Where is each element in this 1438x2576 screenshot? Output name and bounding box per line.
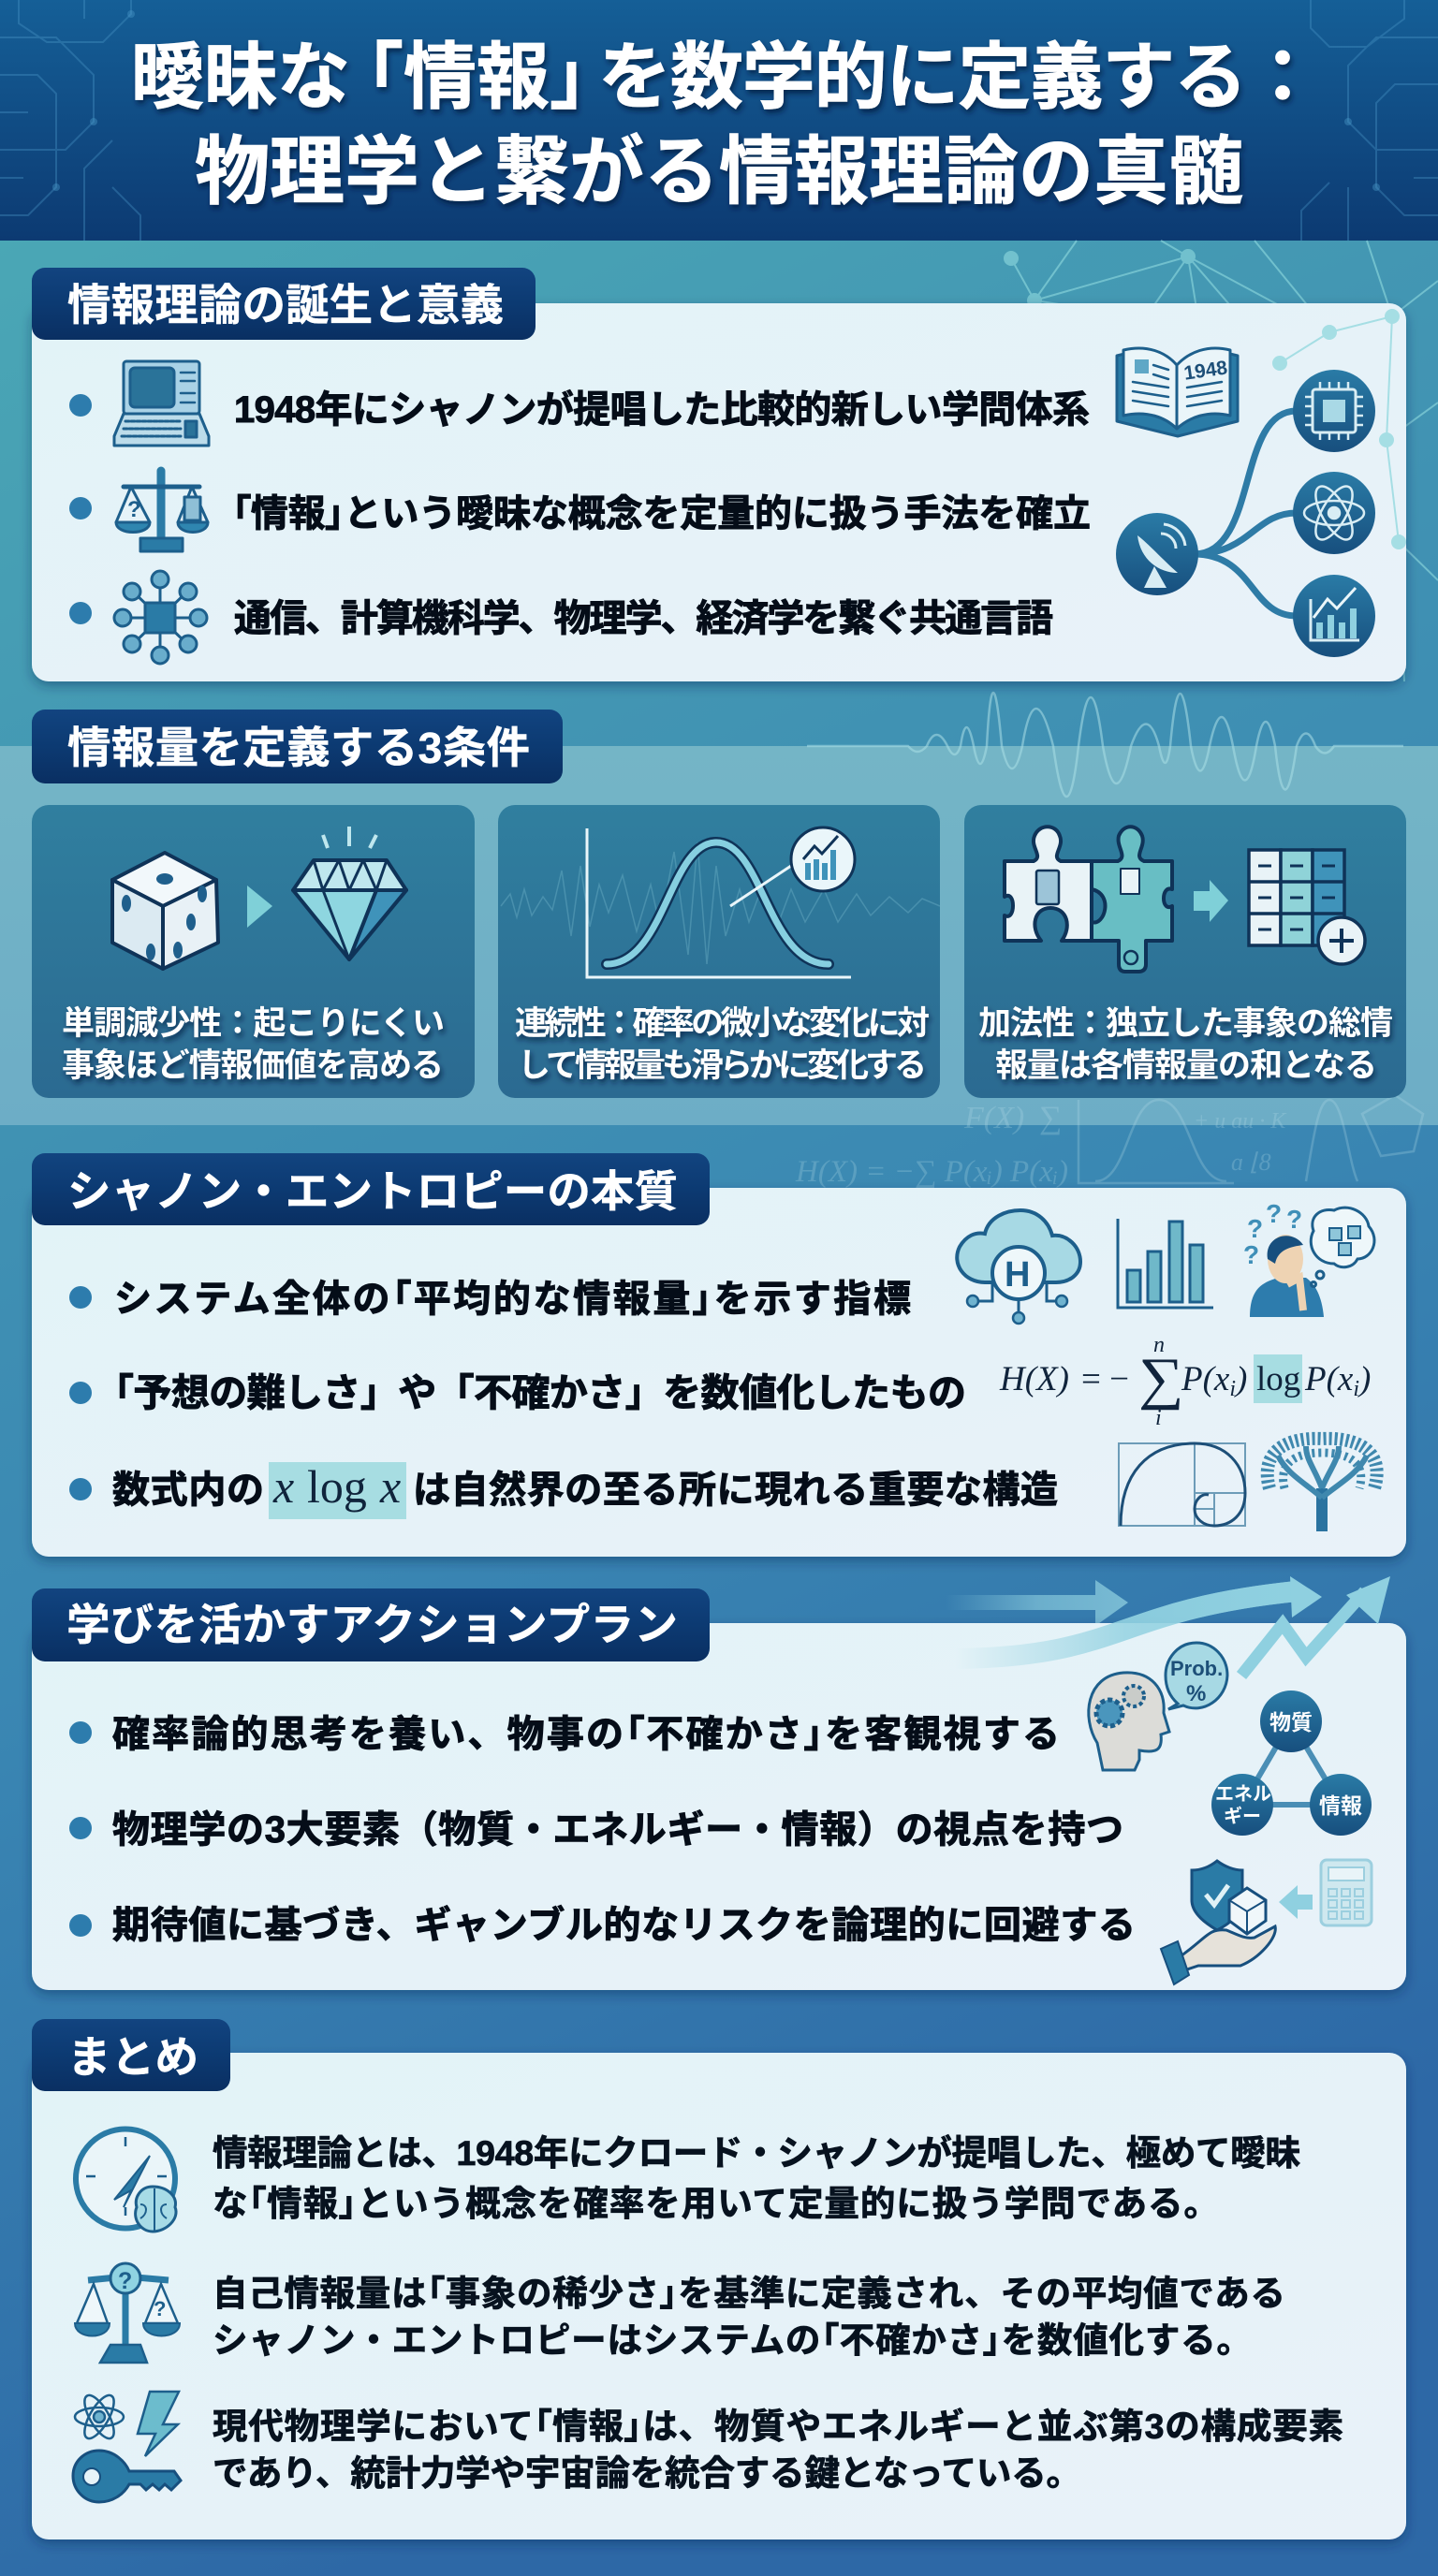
diagram: matter energy information: 情報: [1319, 1793, 1362, 1818]
icon: table with plus: [1249, 850, 1365, 964]
bullet list: 通信、計算機科学、物理学、経済学を繋ぐ共通言語: [234, 598, 1053, 639]
caption: [978, 1005, 1393, 1084]
chart: bell curve over noise: [501, 827, 940, 977]
heading tab: まとめ: [67, 2033, 198, 2082]
icon: cloud H: [957, 1210, 1080, 1324]
formula: ∑: [1138, 1347, 1184, 1411]
summary text: であり、統計力学や宇宙論を統合する鍵となっている。: [213, 2453, 1081, 2493]
bullet list: x: [379, 1460, 401, 1513]
bullet list: log: [307, 1460, 367, 1513]
icon: compass and brain: [76, 2129, 176, 2232]
background formulas: ɑ ⌊8: [1231, 1149, 1271, 1176]
icon: pondering person: ?: [1243, 1240, 1259, 1269]
panel: 情報理論の誕生と意義: [32, 268, 1406, 681]
formula: P(x: [1305, 1360, 1353, 1398]
caption: 単調減少性：起こりにくい: [62, 1005, 445, 1042]
caption: 事象ほど情報価値を高める: [62, 1047, 444, 1084]
formula: [999, 1333, 1371, 1430]
formula: i: [1155, 1406, 1162, 1430]
heading tab: 情報量を定義する3条件: [67, 724, 530, 772]
icon: head with gears: [1089, 1673, 1169, 1770]
header band: [0, 0, 1438, 241]
heading tab: [32, 268, 536, 340]
heading tab: [32, 710, 563, 783]
icon: open book 1948: 1948: [1182, 357, 1229, 385]
caption: 報量は各情報量の和となる: [995, 1047, 1377, 1084]
summary text: 情報理論とは、1948年にクロード・シャノンが提唱した、極めて曖昧: [213, 2133, 1300, 2173]
icon: pondering person: ?: [1266, 1199, 1282, 1228]
section: 情報量を定義する3条件: [32, 710, 1406, 1098]
diagram: matter energy information: エネル: [1215, 1783, 1271, 1805]
formula: = −: [1081, 1360, 1129, 1398]
background formulas: [795, 1095, 1423, 1189]
background formulas: + u ɑu · K: [1194, 1109, 1287, 1134]
heading tab: シャノン・エントロピーの本質: [67, 1167, 678, 1216]
background formulas: H(X) = −∑ P(xᵢ) P(xᵢ): [795, 1155, 1068, 1189]
icon: chip: [1293, 370, 1375, 452]
icon: chip network: [114, 571, 207, 664]
panel: まとめ: [32, 2019, 1406, 2539]
icon: satellite dish: [1116, 513, 1198, 595]
background formulas: ∑: [1039, 1101, 1062, 1135]
bullet list: 「予想の難しさ」や「不確かさ」を数値化したもの: [95, 1371, 966, 1414]
icon: arrow: [1194, 880, 1228, 922]
card: 加法性: [964, 805, 1406, 1098]
heading tab: [32, 1588, 710, 1661]
diagram: dish to fields: [1116, 370, 1375, 657]
formula: ): [1234, 1360, 1247, 1398]
summary text: シャノン・エントロピーはシステムの「不確かさ」を数値化する。: [213, 2320, 1252, 2360]
bullet list: 「情報」という曖昧な概念を定量的に扱う手法を確立: [232, 493, 1091, 534]
summary text: な「情報」という概念を確率を用いて定量的に扱う学問である。: [213, 2184, 1219, 2223]
heading tab: 学びを活かすアクションプラン: [66, 1601, 678, 1649]
formula: P(x: [1181, 1360, 1229, 1398]
panel: シャノン・エントロピーの本質: [32, 1153, 1406, 1557]
bullet list: 1948年にシャノンが提唱した比較的新しい学問体系: [234, 389, 1090, 431]
summary text: 自己情報量は「事象の稀少さ」を基準に定義され、その平均値である: [213, 2274, 1285, 2313]
formula: i: [1229, 1377, 1236, 1401]
icon: vintage computer: [114, 361, 209, 446]
icon: atom: [1293, 472, 1375, 554]
formula: H(X): [999, 1360, 1069, 1398]
icon: scale with question marks: ?: [154, 2297, 166, 2320]
icon: pondering person: ?: [1286, 1205, 1302, 1234]
diagram: matter energy information: [1211, 1690, 1372, 1836]
background formulas: F(X): [963, 1101, 1024, 1135]
summary text: [213, 2133, 1343, 2493]
icon: shield, dice, hand: [1161, 1861, 1275, 1984]
icon: growth chart: [1293, 575, 1375, 657]
bullet list: [69, 1279, 1058, 1519]
background wave: [807, 693, 1403, 797]
caption: 加法性：独立した事象の総情: [978, 1005, 1393, 1042]
growth arrows overlay: [955, 1576, 1390, 1676]
card: 連続性: [498, 805, 940, 1098]
icon: golden spiral: [1119, 1443, 1245, 1526]
bullet list: [69, 1714, 1136, 1946]
heading tab: [32, 1153, 710, 1225]
icon: calculator and arrow: [1279, 1860, 1372, 1925]
icon: probability bubble: [1166, 1643, 1227, 1709]
diagram: matter energy information: 物質: [1269, 1710, 1313, 1734]
bullet list: 確率論的思考を養い、物事の「不確かさ」を客観視する: [112, 1714, 1060, 1755]
title: 曖昧な: [131, 36, 350, 118]
icon: atom, bolt, key: [73, 2391, 181, 2502]
icon: trend bubble: [791, 827, 855, 891]
heading tab: 情報理論の誕生と意義: [67, 281, 504, 329]
bullet list: は自然界の至る所に現れる重要な構造: [413, 1470, 1058, 1511]
title: 物理学と繋がる情報理論の真髄: [195, 130, 1243, 213]
heading tab: [32, 2019, 230, 2091]
icon: puzzle pieces: [1005, 827, 1172, 972]
card: 単調減少性: [32, 805, 475, 1098]
background arrows: [946, 1580, 1297, 1659]
bullet list: x: [272, 1460, 294, 1513]
icon: probability bubble: %: [1186, 1681, 1206, 1706]
bullet list: 物理学の3大要素（物質・エネルギー・情報）の視点を持つ: [112, 1809, 1123, 1851]
formula: ): [1357, 1360, 1371, 1398]
icon: scale with question marks: ?: [118, 2268, 132, 2294]
title: [131, 36, 1319, 213]
panel: 学びを活かすアクションプラン: [32, 1576, 1406, 1990]
icon: bar chart: [1118, 1219, 1213, 1308]
bullet list: [69, 389, 1091, 639]
icon: cloud H: H: [1005, 1255, 1030, 1295]
title: を数学的に定義する：: [598, 36, 1319, 118]
icon: balance scale: ?: [127, 497, 141, 522]
caption: [515, 1005, 930, 1084]
formula: i: [1353, 1377, 1359, 1401]
icon: pondering person: ?: [1247, 1214, 1263, 1243]
icon: scale with question marks: [75, 2263, 180, 2363]
icon: balance scale: [116, 471, 208, 551]
icon: fractal tree: [1268, 1439, 1377, 1531]
formula: log: [1256, 1360, 1300, 1398]
caption: 連続性：確率の微小な変化に対: [515, 1005, 930, 1042]
icon: dice: [112, 853, 218, 969]
bullet list: システム全体の「平均的な情報量」を示す指標: [114, 1279, 911, 1320]
icon: probability bubble: Prob.: [1170, 1657, 1223, 1680]
icon: diamond: [293, 827, 406, 959]
icon: arrow: [247, 886, 272, 928]
icon: open book 1948: [1117, 348, 1238, 436]
diagram: matter energy information: ギー: [1224, 1806, 1261, 1827]
bullet list: 数式内の: [112, 1470, 264, 1511]
summary text: 現代物理学において「情報」は、物質やエネルギーと並ぶ第3の構成要素: [213, 2407, 1343, 2446]
bullet list: 期待値に基づき、ギャンブル的なリスクを論理的に回避する: [112, 1905, 1136, 1946]
caption: して情報量も滑らかに変化する: [518, 1047, 927, 1084]
caption: [62, 1005, 445, 1084]
icon: pondering person: [1243, 1199, 1374, 1317]
formula: n: [1153, 1333, 1165, 1357]
title: 「情報」: [330, 36, 623, 118]
background network graphic: [1005, 241, 1438, 681]
